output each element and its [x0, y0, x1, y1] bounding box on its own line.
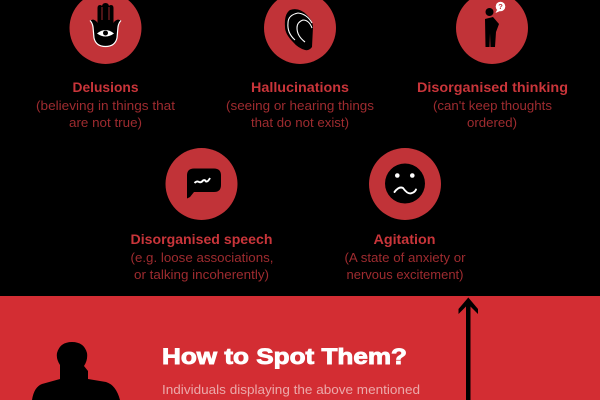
agitation text: (A state of anxiety or — [344, 251, 466, 265]
hallucinations text — [226, 80, 374, 130]
icon: hand with eye — [70, 0, 142, 64]
disorganised thinking text: Disorganised thinking — [417, 80, 568, 95]
delusions text: Delusions — [72, 80, 138, 95]
icon: ear — [264, 0, 336, 64]
arrow up — [458, 298, 478, 400]
icon: person silhouette — [32, 342, 120, 400]
agitation text: Agitation — [374, 232, 436, 247]
disorganised speech text: Disorganised speech — [130, 232, 272, 247]
delusions text — [36, 80, 176, 130]
panel: how to spot them — [0, 296, 600, 400]
hallucinations text: Hallucinations — [251, 80, 349, 95]
disorganised thinking text: ordered) — [467, 116, 517, 130]
hallucinations text: that do not exist) — [251, 116, 349, 130]
delusions text: are not true) — [69, 116, 142, 130]
disorganised thinking text: (can't keep thoughts — [433, 99, 552, 113]
agitation text — [344, 232, 466, 282]
icon: speech bubble — [166, 148, 238, 220]
icon: agitated face — [369, 148, 441, 220]
disorganised speech text — [130, 232, 274, 282]
body text: Individuals displaying the above mentioned — [162, 383, 420, 397]
hallucinations text: (seeing or hearing things — [226, 99, 374, 113]
icon: thinking person — [456, 0, 528, 64]
agitation text: nervous excitement) — [346, 268, 464, 282]
icon: thinking person: ? — [498, 2, 503, 11]
heading: how to spot them: How to Spot Them? — [162, 344, 407, 369]
disorganised thinking text — [417, 80, 568, 130]
delusions text: (believing in things that — [36, 99, 176, 113]
disorganised speech text: or talking incoherently) — [134, 268, 269, 282]
disorganised speech text: (e.g. loose associations, — [130, 251, 274, 265]
